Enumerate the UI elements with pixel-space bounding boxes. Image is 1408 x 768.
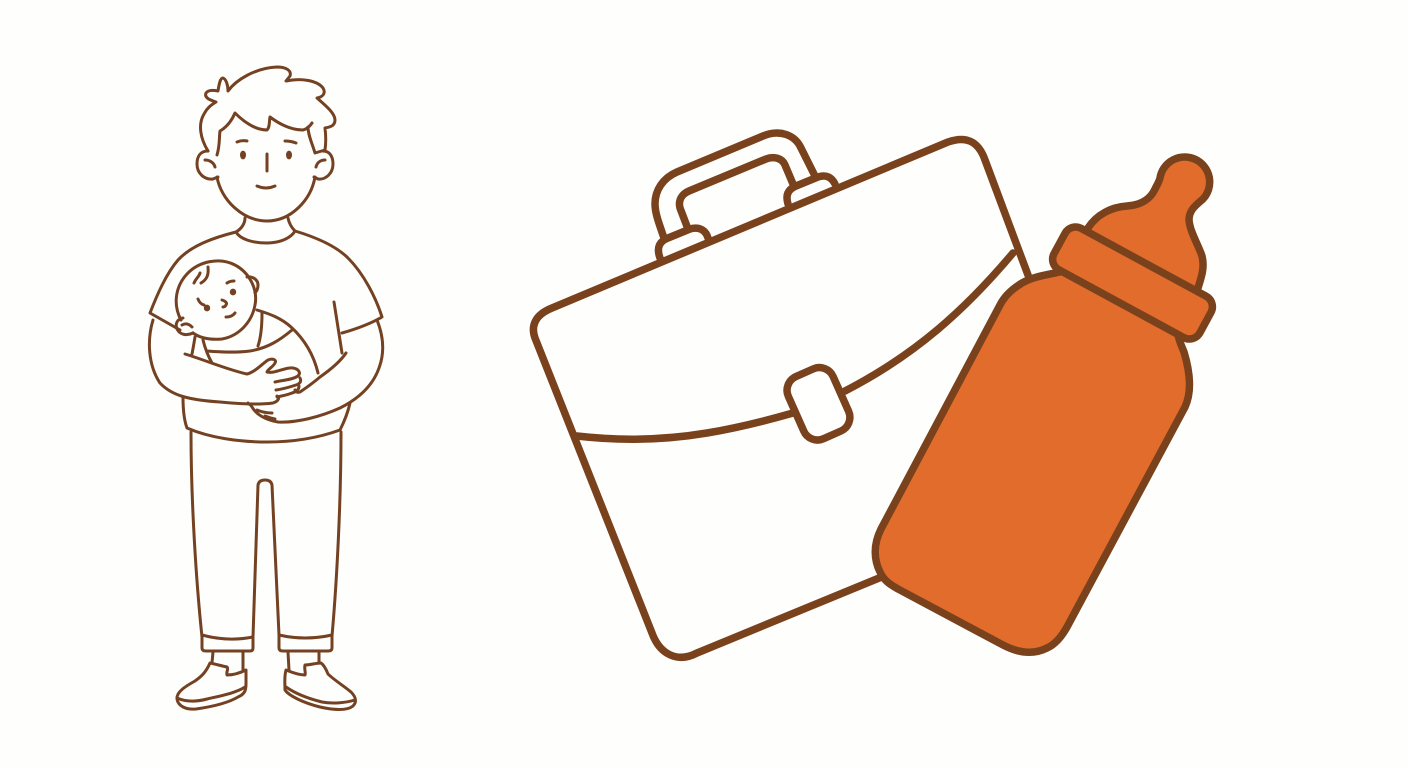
parent trousers — [191, 432, 341, 651]
baby — [176, 261, 318, 373]
bottle body — [875, 272, 1189, 652]
parent torso and shirt — [150, 218, 382, 442]
bottle nipple — [1088, 157, 1210, 288]
icon: briefcase — [533, 133, 1028, 657]
briefcase clasp — [782, 363, 855, 445]
icon: parent holding baby — [149, 67, 383, 710]
bottle collar — [1048, 223, 1217, 343]
right shoe — [285, 652, 355, 710]
parent arms and hands — [149, 320, 383, 422]
icon: baby bottle — [875, 157, 1217, 652]
briefcase flap — [577, 253, 1013, 439]
left shoe — [177, 652, 246, 709]
parent head and hair — [197, 67, 335, 221]
briefcase handle — [655, 133, 835, 258]
briefcase body — [533, 139, 1028, 657]
